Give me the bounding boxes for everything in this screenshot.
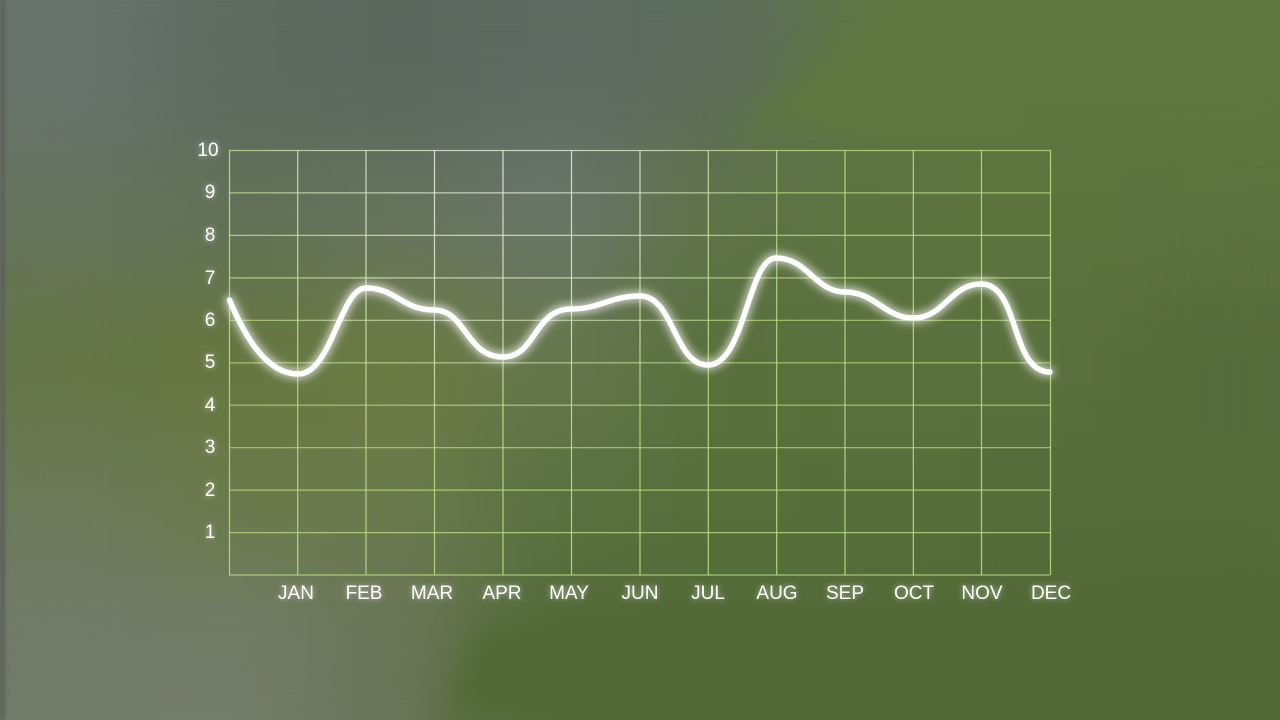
axis labels glow: 2	[205, 480, 215, 501]
axis labels glow: SEP	[826, 583, 864, 604]
axis labels glow: 5	[205, 352, 215, 373]
x-axis month labels: DEC	[1031, 583, 1071, 604]
dark strip on left edge	[0, 0, 5, 720]
axis labels glow: 8	[205, 225, 215, 246]
axis labels glow: 4	[205, 395, 216, 416]
y-axis labels: 10	[197, 140, 219, 161]
axis labels glow: 1	[205, 522, 215, 543]
y-axis labels: 3	[205, 437, 215, 458]
data line with glow	[230, 258, 1050, 374]
axis labels glow: 7	[205, 268, 215, 289]
y-axis labels	[197, 140, 219, 543]
x-axis month labels: JUL	[691, 583, 725, 604]
axis labels glow: 6	[205, 310, 215, 331]
axis labels glow: AUG	[756, 583, 798, 604]
y-axis labels: 4	[205, 395, 216, 416]
y-axis labels: 5	[205, 352, 215, 373]
y-axis labels: 8	[205, 225, 215, 246]
axis labels glow: JUN	[622, 583, 658, 604]
x-axis month labels: JAN	[278, 583, 314, 604]
y-axis labels: 9	[205, 182, 215, 203]
axis labels glow: JAN	[278, 583, 314, 604]
axis labels glow: DEC	[1031, 583, 1071, 604]
x-axis month labels: MAY	[549, 583, 589, 604]
x-axis month labels: MAR	[411, 583, 453, 604]
x-axis month labels: AUG	[756, 583, 798, 604]
axis labels glow: NOV	[961, 583, 1003, 604]
x-axis month labels: OCT	[894, 583, 934, 604]
x-axis month labels: FEB	[346, 583, 382, 604]
axis labels glow: MAR	[411, 583, 453, 604]
y-axis labels: 7	[205, 268, 215, 289]
y-axis labels: 2	[205, 480, 215, 501]
x-axis month labels: NOV	[961, 583, 1003, 604]
axis labels glow: 10	[197, 140, 219, 161]
axis labels glow: APR	[482, 583, 522, 604]
x-axis month labels	[278, 583, 1071, 604]
axis labels glow: 9	[205, 182, 215, 203]
y-axis labels: 6	[205, 310, 215, 331]
x-axis month labels: APR	[482, 583, 522, 604]
axis labels glow: OCT	[894, 583, 934, 604]
chart grid	[229, 150, 1050, 575]
x-axis month labels: SEP	[826, 583, 864, 604]
y-axis labels: 1	[205, 522, 215, 543]
axis labels glow: JUL	[691, 583, 725, 604]
axis labels glow: 3	[205, 437, 215, 458]
x-axis month labels: JUN	[622, 583, 658, 604]
axis labels glow: FEB	[346, 583, 382, 604]
axis labels glow	[197, 140, 1071, 604]
axis labels glow: MAY	[549, 583, 589, 604]
